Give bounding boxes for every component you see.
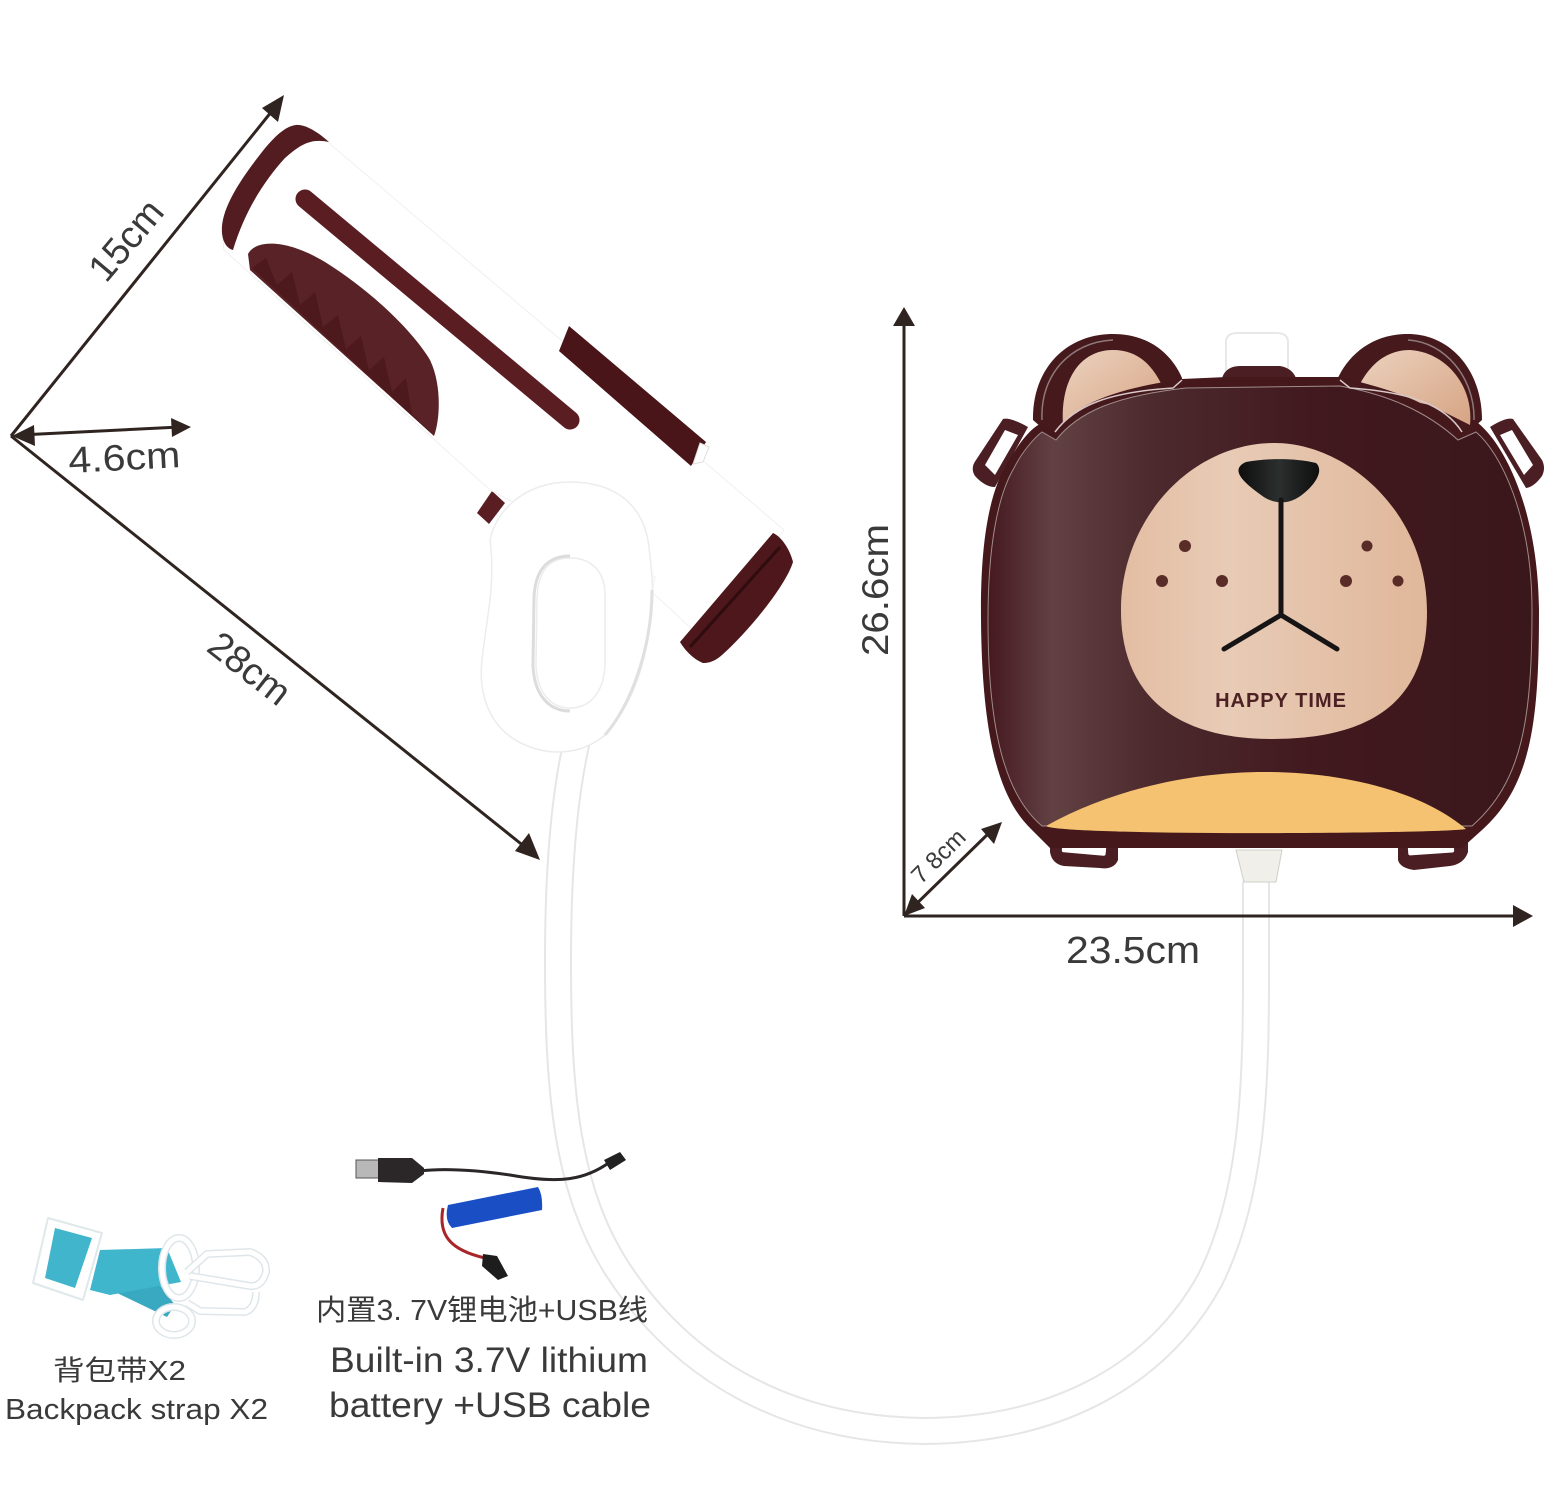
- label: 7.8cm: 7 8cm: [906, 824, 971, 889]
- backpack body: [981, 377, 1539, 848]
- label: battery English line 1: Built-in 3.7V lithium: [330, 1341, 648, 1380]
- gun long slot: [305, 199, 570, 420]
- plastic rings and clips: [156, 1238, 266, 1335]
- gun trigger tab: [477, 491, 505, 524]
- gun ribbed grip: [248, 244, 439, 436]
- side strap loop right: [1490, 419, 1544, 488]
- dimension arrows: gun: [11, 95, 540, 860]
- label: 26.6cm: 26.6cm: [855, 524, 896, 656]
- label: 15cm: 15cm: [81, 192, 173, 290]
- label: strap Chinese: 背包带X2: [53, 1355, 186, 1386]
- label: battery Chinese: 内置3. 7V锂电池+USB线: [316, 1294, 648, 1327]
- hose connector: [1236, 850, 1282, 882]
- water gun: [222, 125, 793, 752]
- gun rear cap: [222, 125, 329, 250]
- label: 28cm: 28cm: [199, 624, 299, 714]
- bear mouth: [1224, 500, 1337, 649]
- dimension arrows: backpack: [893, 307, 1533, 927]
- ear edge highlights: [1055, 380, 1462, 432]
- strap webbing: [117, 1285, 175, 1317]
- water hose: [558, 745, 1256, 1431]
- top cap: [1226, 333, 1288, 372]
- left ear: [1033, 334, 1182, 435]
- bottom strap loops: [1050, 834, 1118, 868]
- label: battery English line 2: battery +USB cable: [329, 1386, 651, 1425]
- HAPPY TIME label: HAPPY TIME: [1215, 690, 1347, 712]
- bear nose: [1238, 459, 1319, 502]
- bear face: [1121, 443, 1427, 739]
- backpack strap: [33, 1218, 266, 1335]
- gun body: [223, 128, 784, 640]
- label: 4.6cm: 4.6cm: [67, 434, 181, 481]
- USB cable: [356, 1152, 626, 1183]
- bear backpack: [973, 333, 1544, 882]
- bear freckles: [1156, 540, 1404, 587]
- gun handle with finger hole: [481, 482, 653, 752]
- label: strap English: Backpack strap X2: [5, 1394, 268, 1426]
- buckle frame: [33, 1218, 102, 1300]
- side strap loop left: [973, 419, 1028, 487]
- label: 23.5cm: 23.5cm: [1066, 930, 1200, 972]
- gun nozzle: [680, 533, 793, 663]
- right ear: [1337, 334, 1482, 435]
- yellow belly: [1046, 772, 1466, 833]
- battery: [442, 1187, 542, 1280]
- gun top slider: [559, 326, 706, 466]
